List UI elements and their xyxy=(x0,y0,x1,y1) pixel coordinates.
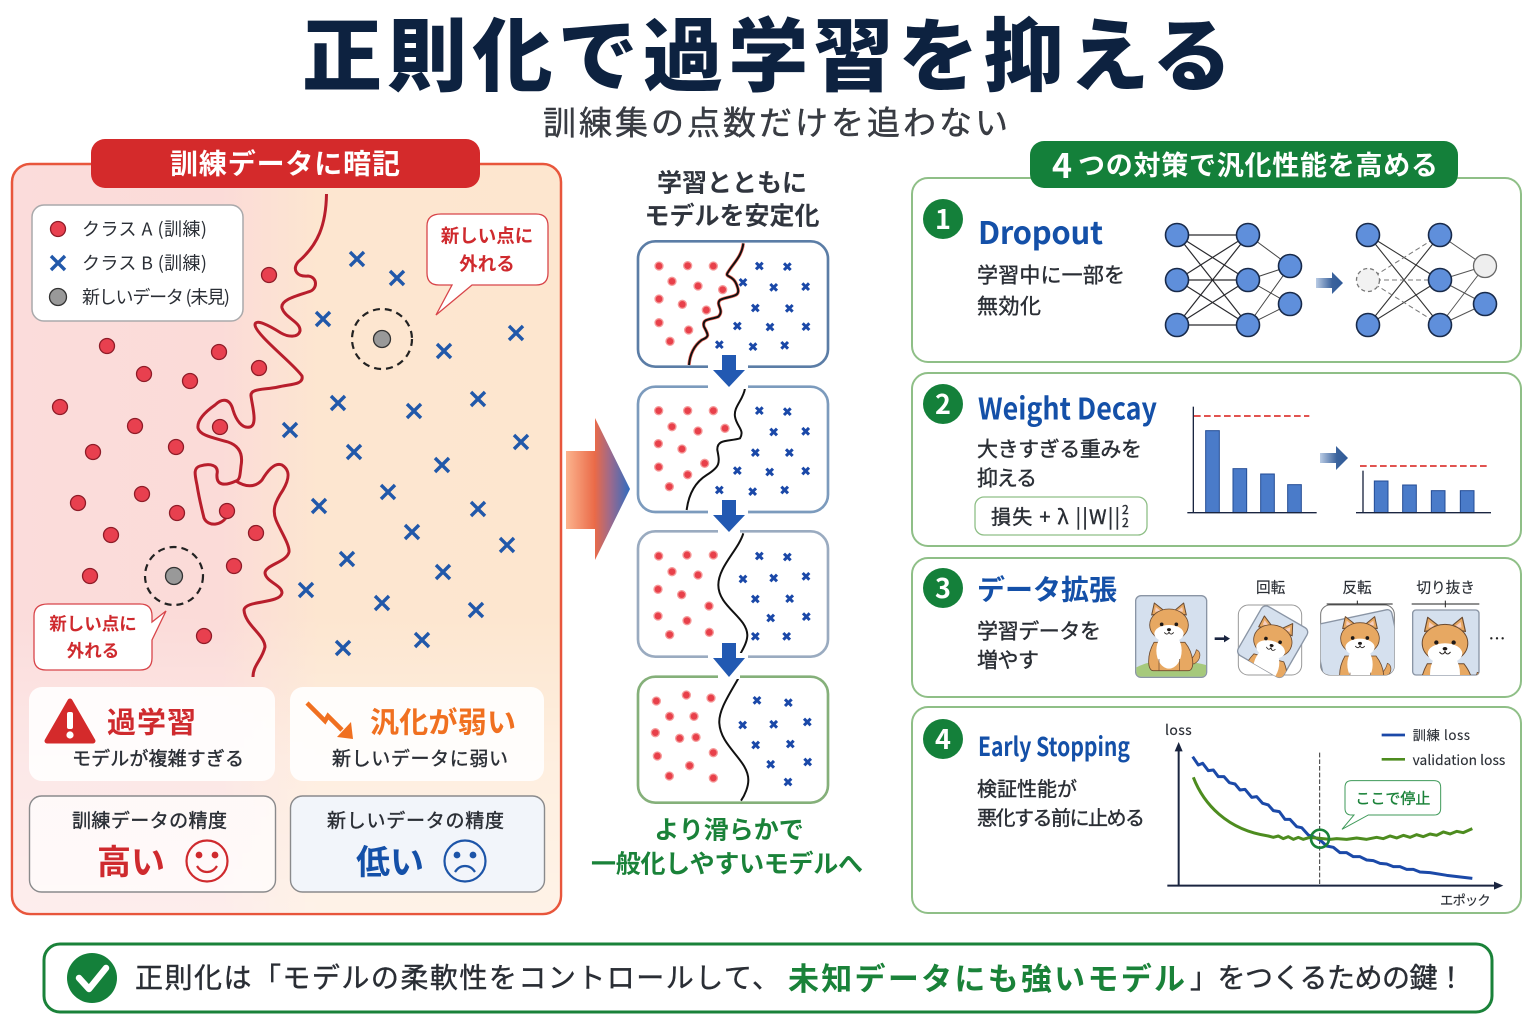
chart legend: 訓練 loss xyxy=(1413,725,1470,744)
badge 1 xyxy=(923,198,963,239)
badge 3: 3 xyxy=(935,567,951,606)
center conclusion: より滑らかで xyxy=(654,810,804,846)
card 2: Weight Decay: Weight Decay xyxy=(978,384,1157,428)
formula: 損失 + λ ||W|| xyxy=(991,501,1120,530)
card: weak generalization: 汎化が弱い xyxy=(370,700,516,742)
callout: stop here xyxy=(1342,781,1441,829)
legend: クラス A (訓練) xyxy=(82,216,207,242)
callout: stop here: ここで停止 xyxy=(1355,788,1430,809)
formula xyxy=(975,497,1147,535)
center heading xyxy=(644,164,820,232)
card 2: Weight Decay xyxy=(912,373,1521,546)
badge 1: 1 xyxy=(935,198,951,237)
formula: 2 xyxy=(1122,501,1129,518)
network: before xyxy=(1166,224,1302,336)
key message banner: 正則化は「モデルの柔軟性をコントロールして、 xyxy=(135,956,780,996)
card 1: Dropout: Dropout xyxy=(978,208,1103,253)
heading: memorize training data xyxy=(91,139,480,188)
stage 2 chart xyxy=(638,387,828,512)
badge 4 xyxy=(923,718,963,759)
card 1: Dropout: 学習中に一部を xyxy=(977,260,1125,290)
new data point: upper xyxy=(352,309,412,369)
ellipsis xyxy=(1490,637,1504,639)
card: overfitting xyxy=(29,687,275,781)
arrow xyxy=(1316,272,1343,294)
card 2: Weight Decay: 大きすぎる重みを xyxy=(977,434,1142,464)
heading: memorize training data: 訓練データに暗記 xyxy=(170,142,400,182)
image: rotated dog xyxy=(1237,604,1308,678)
card 4: Early Stopping: 検証性能が xyxy=(977,773,1077,802)
callout: lower: 外れる xyxy=(67,638,119,663)
bar chart: after xyxy=(1356,466,1491,513)
center conclusion xyxy=(591,810,863,880)
formula: 2 xyxy=(1122,514,1129,531)
callout: upper: 新しい点に xyxy=(441,222,533,248)
callout: lower: 新しい点に xyxy=(49,611,137,636)
heading: four countermeasures: 4 xyxy=(1052,139,1072,188)
badge 3 xyxy=(923,567,963,608)
subtitle: 訓練集の点数だけを追わない xyxy=(543,96,1008,144)
card 4: Early Stopping xyxy=(912,707,1521,913)
heading: four countermeasures xyxy=(1030,139,1458,188)
icon: smile xyxy=(186,840,228,882)
loss chart: loss xyxy=(1165,720,1192,740)
label: flip: 反転 xyxy=(1342,576,1372,597)
icon: warning xyxy=(47,701,93,741)
big arrow xyxy=(566,418,630,560)
network: after dropout xyxy=(1356,224,1496,336)
legend xyxy=(32,205,243,321)
card 3: data augmentation: 学習データを xyxy=(977,616,1101,646)
class A points xyxy=(52,268,276,644)
arrow: stage 2 to 3 xyxy=(708,500,748,534)
loss chart xyxy=(1165,720,1505,909)
card 3: data augmentation: データ拡張 xyxy=(977,568,1117,608)
card 3: data augmentation xyxy=(912,558,1521,705)
arrow xyxy=(1215,635,1230,642)
stage 4 chart xyxy=(638,677,828,803)
center heading: 学習とともに xyxy=(657,164,807,200)
stage 1 chart xyxy=(638,241,828,367)
card 3: data augmentation: 増やす xyxy=(977,644,1039,674)
new data point: lower xyxy=(145,547,203,605)
loss chart: エポック xyxy=(1440,890,1491,909)
arrow: stage 3 to 4 xyxy=(708,643,748,679)
badge 4: 4 xyxy=(935,718,951,757)
key message banner xyxy=(44,944,1492,1012)
card 2: Weight Decay: 抑える xyxy=(977,462,1037,492)
badge 2: 2 xyxy=(935,383,951,422)
icon: down arrow xyxy=(307,703,353,739)
icon: check xyxy=(67,953,117,1003)
augmentation images xyxy=(1136,576,1504,705)
bar chart: before xyxy=(1187,407,1317,513)
label: rotate: 回転 xyxy=(1256,576,1286,597)
card: new data accuracy: 新しいデータの精度 xyxy=(327,806,504,833)
arrow: stage 1 to 2 xyxy=(708,355,748,389)
callout: upper: 外れる xyxy=(459,250,515,276)
arrow xyxy=(1320,446,1348,470)
legend: クラス B (訓練) xyxy=(82,250,207,276)
callout: lower xyxy=(34,604,166,670)
card: new data accuracy: 低い xyxy=(356,835,424,884)
chart legend: validation loss xyxy=(1413,749,1505,769)
card 1: Dropout: 無効化 xyxy=(977,290,1041,320)
card 4: Early Stopping: 悪化する前に止める xyxy=(977,802,1145,831)
icon: frown xyxy=(444,840,486,882)
chart legend xyxy=(1382,725,1505,769)
decision boundary xyxy=(195,194,326,677)
label: crop: 切り抜き xyxy=(1416,576,1475,597)
legend: 新しいデータ (未見) xyxy=(82,284,230,310)
card: training accuracy xyxy=(30,796,276,892)
callout: upper xyxy=(427,214,548,315)
stage 3 chart xyxy=(638,531,828,657)
heading: four countermeasures: つの対策で汎化性能を高める xyxy=(1078,144,1438,183)
center heading: モデルを安定化 xyxy=(644,196,820,232)
card: training accuracy: 高い xyxy=(97,835,165,884)
badge 2 xyxy=(923,383,963,424)
card: overfitting: 過学習 xyxy=(107,700,196,742)
center conclusion: 一般化しやすいモデルへ xyxy=(591,844,863,880)
class B points xyxy=(283,252,528,655)
card: weak generalization: 新しいデータに弱い xyxy=(332,744,508,771)
panel: overfitting xyxy=(12,139,561,914)
card: training accuracy: 訓練データの精度 xyxy=(72,806,227,833)
card 1: Dropout xyxy=(912,139,1521,362)
image: flipped dog xyxy=(1320,600,1395,676)
card: weak generalization xyxy=(290,687,544,781)
card: overfitting: モデルが複雑すぎる xyxy=(72,744,244,771)
image: cropped dog xyxy=(1412,600,1480,676)
card: new data accuracy xyxy=(290,796,544,892)
image: original dog xyxy=(1136,596,1207,677)
card 4: Early Stopping: Early Stopping xyxy=(978,727,1130,764)
key message banner: 未知データにも強いモデル xyxy=(788,954,1185,999)
key message banner: 」をつくるための鍵！ xyxy=(1190,956,1465,996)
